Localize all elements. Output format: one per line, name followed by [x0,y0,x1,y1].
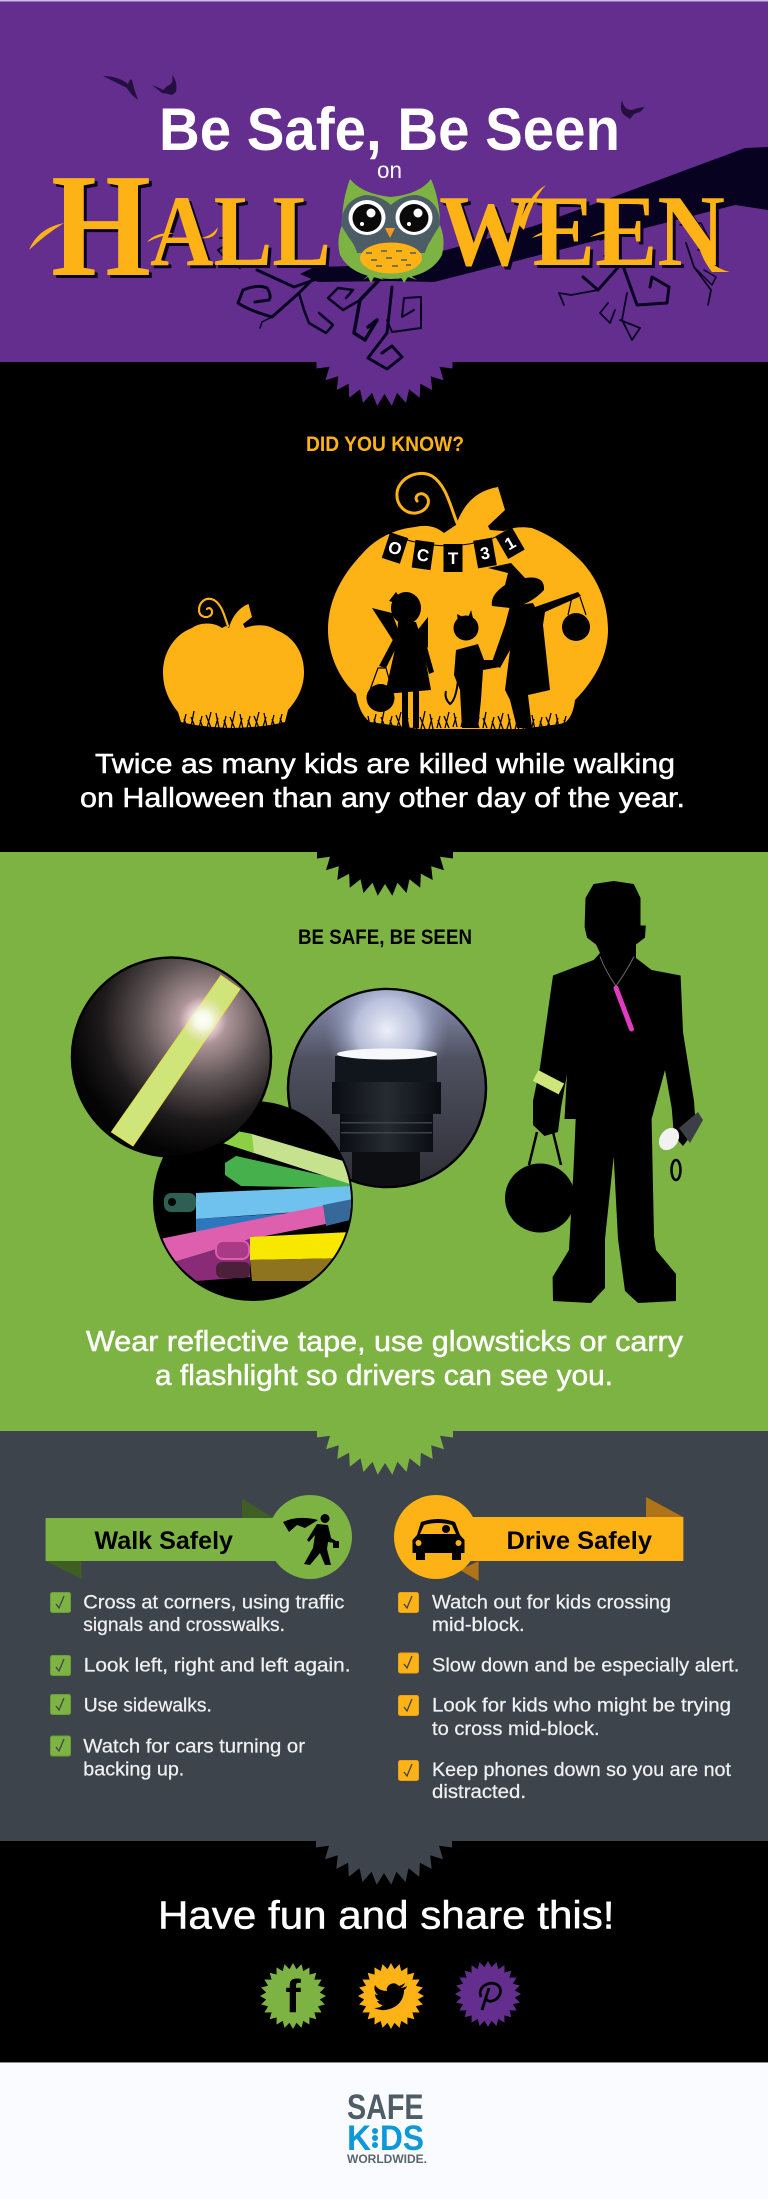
panel: footer logo [0,2062,768,2199]
title: Halloween lettering: WEEN [442,178,728,291]
checklist: walk safely [50,1592,350,1781]
burst divider slate [316,1841,452,1885]
icon: twitter badge [358,1963,424,2029]
panel: header purple [0,0,768,369]
checklist: drive safely: to cross mid-block. [432,1719,600,1740]
panel: did you know [0,362,768,852]
text: visibility advice: a flashlight so drivers can see you. [155,1360,613,1392]
checklist: walk safely: signals and crosswalks. [83,1615,285,1636]
checklist: drive safely: Look for kids who might be trying [432,1696,731,1717]
text: Halloween statistic: Twice as many kids are killed while walking [95,748,675,779]
icon: facebook badge [260,1963,326,2029]
heading: did you know: DID YOU KNOW? [306,433,464,456]
banner: OCT 31 [382,527,525,572]
title: Halloween lettering: H [54,147,154,311]
text: visibility advice [86,1326,684,1392]
panel: share [0,1841,768,2062]
checklist: drive safely [398,1592,739,1803]
checklist: drive safely: mid-block. [432,1615,525,1636]
checklist: walk safely: Look left, right and left again. [84,1656,351,1677]
banner: drive safely: Drive Safely [506,1527,652,1555]
logo: Safe Kids Worldwide: K [347,2119,371,2158]
text: Halloween statistic [80,748,685,813]
banner: OCT 31: T [448,549,459,568]
illustration: Frankenstein child silhouette [505,881,703,1303]
text: visibility advice: Wear reflective tape, use glowsticks or carry [86,1326,684,1358]
icon: car [412,1519,464,1560]
icon: large pumpkin with children [328,473,608,730]
checklist: walk safely: Use sidewalks. [84,1696,212,1717]
burst divider black [317,852,453,896]
icon: pedestrian [283,1514,339,1565]
banner: OCT 31: O [386,537,404,560]
banner: OCT 31: 1 [501,533,519,554]
icon: small pumpkin [163,599,304,729]
title: Halloween lettering: WEEN [439,175,725,288]
burst divider green [317,1431,453,1475]
checklist: walk safely: backing up. [83,1760,184,1781]
tree branch with curly twigs [218,147,768,369]
banner: walk safely [46,1495,352,1579]
checklist: walk safely: Watch for cars turning or [83,1737,306,1758]
icon: pinterest badge [455,1961,521,2027]
silhouette: devil child [446,610,500,728]
logo: Safe Kids Worldwide: WORLDWIDE. [347,2154,427,2166]
title: Halloween lettering: ALL [153,178,334,291]
panel: walk and drive tips [0,1431,768,1841]
title: on: on [377,157,402,183]
banner: drive safely [394,1495,683,1581]
checklist: drive safely: Keep phones down so you are not [432,1760,732,1781]
logo: Safe Kids Worldwide: SAFE [347,2088,424,2127]
logo: Safe Kids Worldwide [347,2088,427,2166]
bats [103,75,645,119]
burst divider purple [316,362,452,406]
photo: reflective tape circle [72,958,271,1156]
checklist: drive safely: distracted. [432,1782,526,1803]
title: Be Safe, Be Seen: Be Safe, Be Seen [159,96,620,163]
logo: Safe Kids Worldwide: DS [380,2119,424,2158]
banner: OCT 31: C [416,545,430,566]
icon: facebook badge: f [285,1970,301,2022]
title: Halloween lettering: ALL [150,175,331,288]
checklist: drive safely: Slow down and be especially alert. [432,1656,739,1677]
photo: flashlight circle [288,968,486,1192]
panel: be safe be seen [0,852,768,1431]
text: Halloween statistic: on Halloween than any other day of the year. [80,782,685,813]
checklist: drive safely: Watch out for kids crossing [432,1592,671,1614]
silhouette: witch child [488,563,590,728]
silhouette: fairy child [366,592,434,728]
banner: walk safely: Walk Safely [94,1527,233,1555]
banner: OCT 31: 3 [479,543,491,564]
title: Halloween lettering [29,144,730,311]
heading: be safe be seen: BE SAFE, BE SEEN [298,926,472,949]
title: Halloween lettering: H [51,144,151,308]
checklist: walk safely: Cross at corners, using traffic [83,1592,344,1614]
heading: have fun and share: Have fun and share this! [158,1895,614,1938]
icon: owl [338,179,444,283]
photo: glowsticks circle [150,1102,358,1300]
